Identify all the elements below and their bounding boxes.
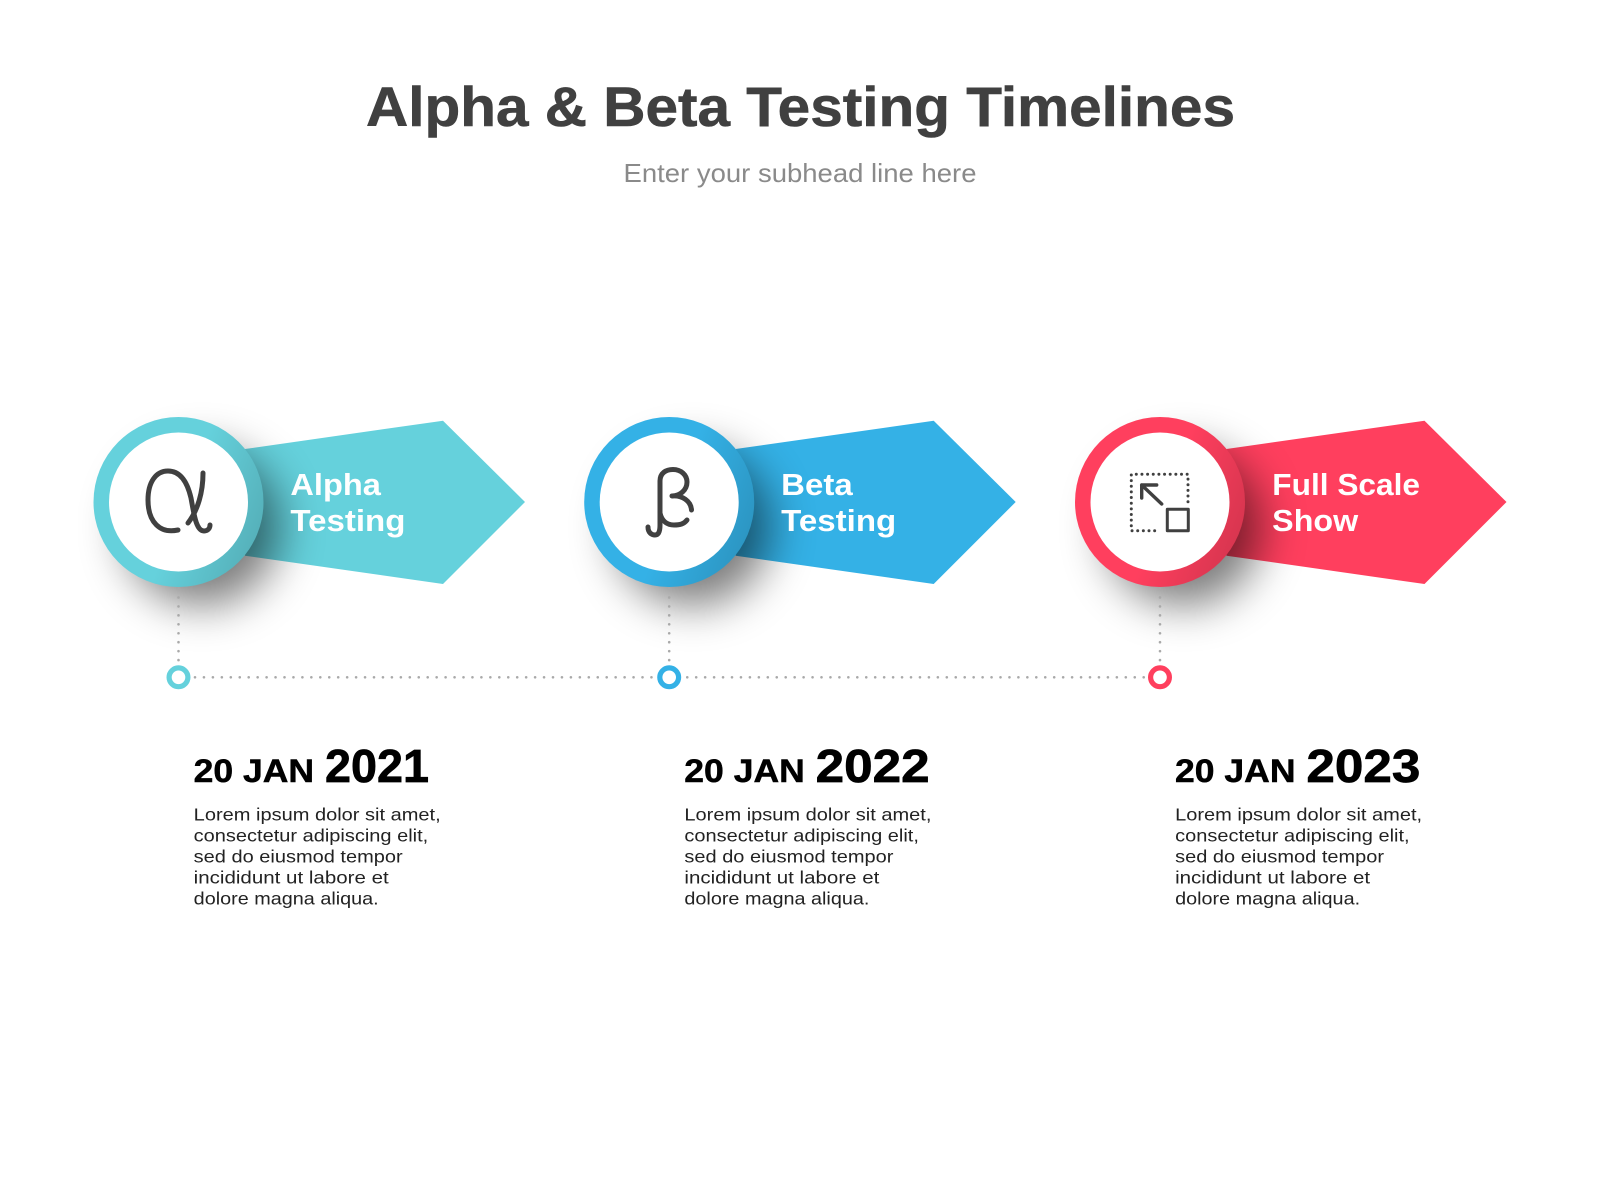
- shadow: alpha circle: [124, 449, 280, 605]
- icon: alpha symbol: [148, 471, 210, 531]
- date: 2021: 2021: [325, 740, 429, 792]
- date: 2022: [684, 740, 930, 792]
- description: alpha: sed do eiusmod tempor: [194, 846, 403, 866]
- arrow banner: full scale: [1226, 421, 1506, 584]
- shadow: beta circle: [615, 449, 771, 605]
- description: beta: consectetur adipiscing elit,: [684, 826, 919, 846]
- description: beta: dolore magna aliqua.: [684, 888, 869, 908]
- description: full scale: dolore magna aliqua.: [1175, 888, 1360, 908]
- ring: full scale: [1075, 417, 1245, 587]
- description: full scale: consectetur adipiscing elit,: [1175, 826, 1410, 846]
- description: beta: [684, 804, 931, 908]
- description: alpha: consectetur adipiscing elit,: [194, 826, 428, 846]
- banner label: alpha: Alpha: [290, 468, 382, 502]
- ring: alpha: [94, 417, 264, 587]
- subtitle: Enter your subhead line here: [624, 158, 976, 188]
- date: 2022: 2022: [816, 740, 930, 792]
- connector: beta: [668, 588, 671, 661]
- step 3: full scale show: [1075, 417, 1506, 908]
- description: alpha: dolore magna aliqua.: [194, 888, 379, 908]
- description: alpha: incididunt ut labore et: [194, 868, 389, 888]
- description: full scale: Lorem ipsum dolor sit amet,: [1175, 804, 1422, 824]
- icon: beta symbol: [648, 470, 692, 535]
- banner label: alpha: Testing: [290, 504, 405, 538]
- connector: alpha: [177, 588, 180, 661]
- title: Alpha & Beta Testing Timelines: [366, 75, 1235, 138]
- description: alpha: [194, 804, 441, 908]
- date: 2021: 20 JAN: [194, 753, 314, 789]
- timeline connector: [195, 676, 1150, 679]
- banner label: full scale: Full Scale: [1272, 468, 1420, 502]
- description: full scale: sed do eiusmod tempor: [1175, 846, 1384, 866]
- description: alpha: Lorem ipsum dolor sit amet,: [194, 804, 441, 824]
- banner label: beta: Beta: [781, 468, 854, 502]
- description: full scale: incididunt ut labore et: [1175, 868, 1370, 888]
- banner label: beta: [781, 468, 896, 538]
- step 1: alpha testing: [94, 417, 525, 908]
- step 2: beta testing: [584, 417, 1016, 908]
- banner label: beta: Testing: [781, 504, 896, 538]
- date: 2021: [194, 740, 429, 792]
- date: 2023: 20 JAN: [1175, 753, 1296, 789]
- date: 2023: 2023: [1306, 740, 1420, 792]
- arrow banner: alpha: [245, 421, 525, 584]
- icon: scale arrows: [1131, 474, 1188, 531]
- banner label: full scale: [1272, 468, 1420, 538]
- description: beta: Lorem ipsum dolor sit amet,: [684, 804, 931, 824]
- date: 2023: [1175, 740, 1420, 792]
- timeline marker: full scale: [1151, 668, 1169, 687]
- description: beta: incididunt ut labore et: [684, 868, 880, 888]
- connector: full scale: [1159, 588, 1161, 661]
- date: 2022: 20 JAN: [684, 753, 805, 789]
- banner label: full scale: Show: [1272, 504, 1358, 538]
- ring: beta: [584, 417, 754, 587]
- description: beta: sed do eiusmod tempor: [684, 846, 894, 866]
- timeline marker: alpha: [169, 668, 188, 687]
- description: full scale: [1175, 804, 1422, 908]
- banner label: alpha: [290, 468, 405, 538]
- shadow: full scale circle: [1106, 449, 1262, 605]
- arrow banner: beta: [736, 421, 1016, 584]
- timeline marker: beta: [660, 668, 679, 687]
